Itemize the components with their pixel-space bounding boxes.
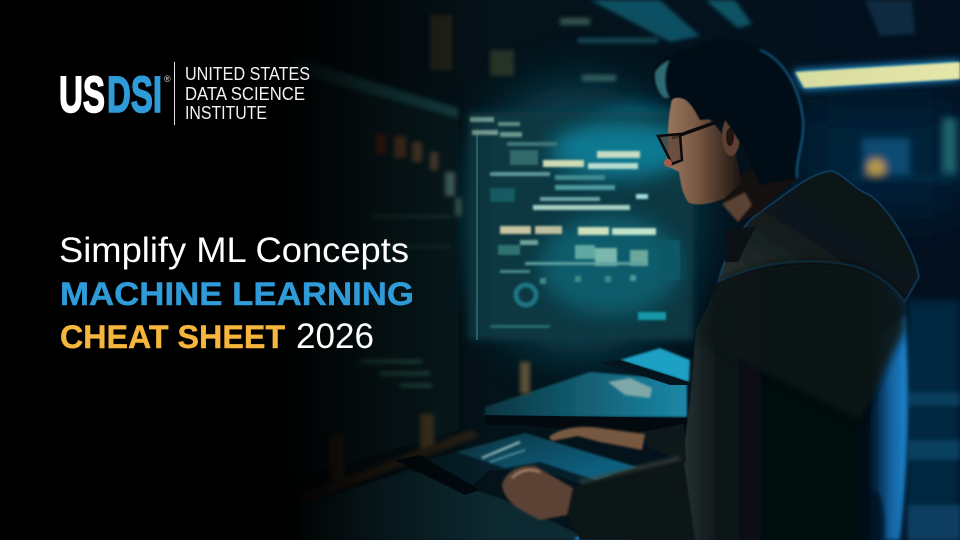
registered mark: ® [164, 74, 171, 84]
person: inner ear shadow [726, 128, 734, 146]
left server panel [290, 56, 480, 505]
person: hood collar [725, 226, 756, 262]
main monitor with glowing data rows [468, 112, 693, 340]
ceiling beams [430, 0, 915, 81]
person: hoodie body [683, 240, 908, 540]
logo text: UNITED STATES [185, 64, 310, 84]
person: hair rim light [655, 60, 670, 98]
person: glasses [658, 120, 722, 164]
title line 3 year: 2026 [296, 317, 374, 356]
logo [59, 62, 310, 125]
person: sleeve highlight [580, 458, 680, 482]
person: hood lower shadow [700, 262, 905, 420]
tablet on desk [420, 433, 640, 492]
logo text: INSTITUTE [185, 103, 267, 123]
person: ear [722, 116, 740, 156]
desk with papers [485, 348, 690, 440]
person [502, 39, 919, 540]
background lit shelf [850, 118, 960, 180]
logo divider [174, 62, 175, 125]
blue reflection at bottom [573, 530, 630, 540]
person: hair back rim light [760, 50, 803, 178]
ceiling light bar [793, 60, 960, 90]
logo text [185, 64, 310, 123]
title line 3 highlight: CHEAT SHEET [60, 319, 285, 355]
logo text: DATA SCIENCE [185, 84, 305, 104]
person: face [667, 98, 742, 204]
person: hood and shoulders [718, 171, 919, 302]
person: lower hand [502, 466, 573, 520]
person: near hand on tablet [549, 427, 645, 450]
person: knuckle highlight [512, 470, 540, 478]
person: hair [653, 39, 803, 185]
logo mark: DSI in blue: DSI [107, 66, 162, 123]
title line 1: Simplify ML Concepts [59, 231, 409, 270]
title [59, 231, 414, 356]
person: far sleeve [640, 424, 686, 462]
title line 2: MACHINE LEARNING [60, 276, 414, 312]
dark left fade overlay [0, 0, 500, 540]
person: neck [722, 170, 797, 222]
person: lit neck patch [722, 192, 752, 222]
logo mark: USDSI: US [59, 66, 105, 123]
keyboard [300, 455, 590, 540]
person: blue rim light on back [868, 315, 908, 540]
person: near sleeve [567, 456, 695, 540]
person: nose highlight [664, 159, 672, 167]
